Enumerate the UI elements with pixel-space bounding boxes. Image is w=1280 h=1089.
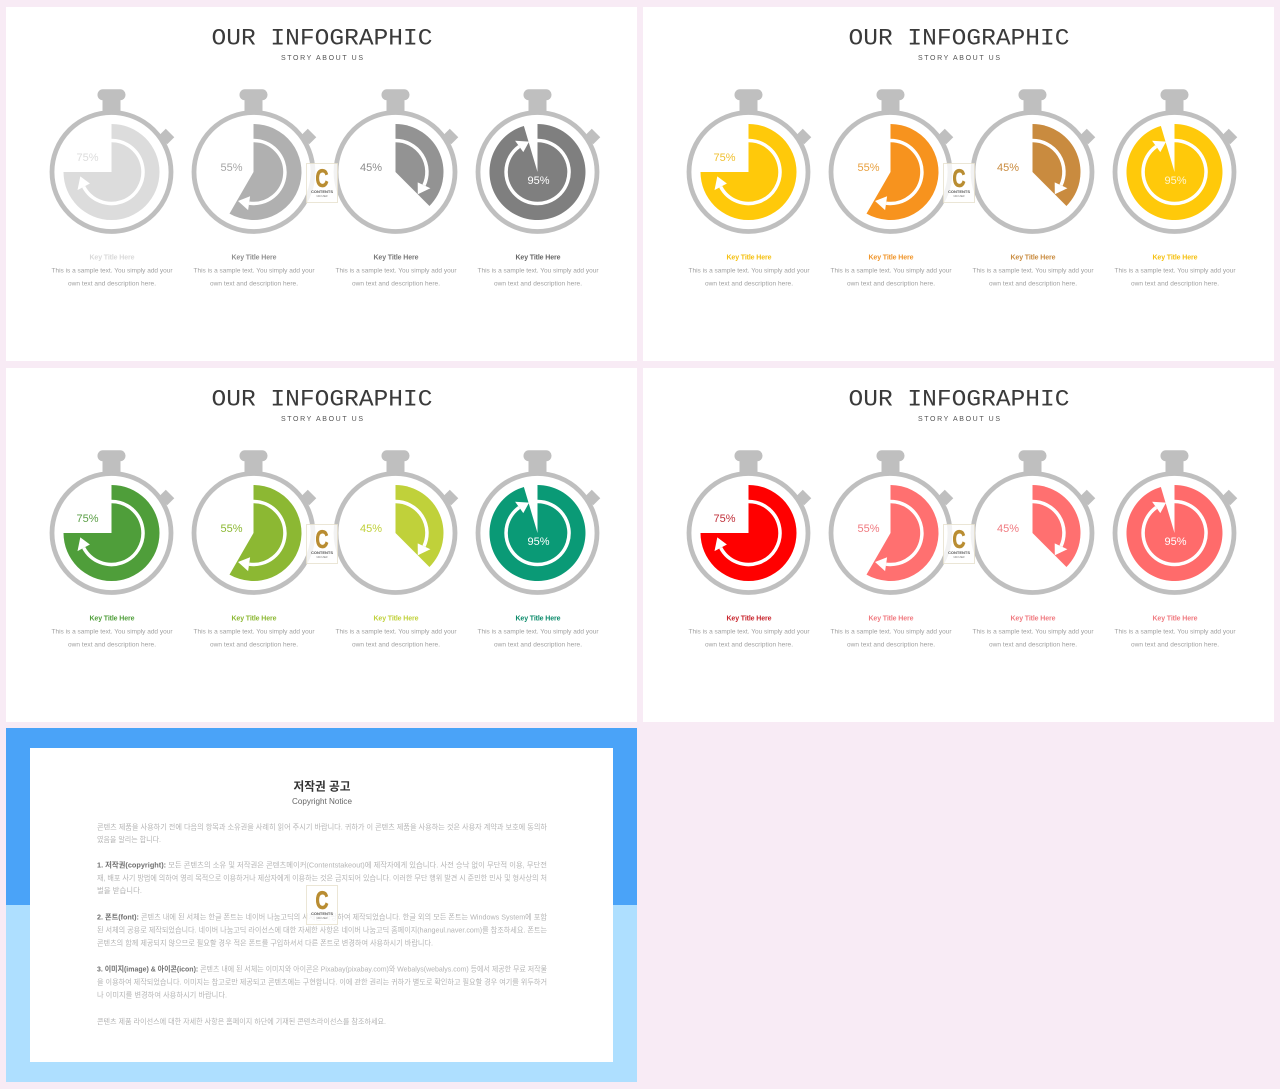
watermark logo: MAC USER — [316, 195, 328, 198]
stopwatch 95%: 95% — [528, 175, 550, 187]
stopwatch 45%: 45% — [360, 162, 382, 174]
caption 1: This is a sample text. You simply add your — [52, 628, 173, 636]
stopwatch 45% — [973, 450, 1095, 592]
stopwatch 45%: 45% — [997, 523, 1019, 535]
stopwatch 95% — [1115, 89, 1237, 232]
caption 1: This is a sample text. You simply add your — [52, 268, 173, 274]
stopwatch 75%: 75% — [76, 152, 99, 164]
watermark logo: CONTENTS — [311, 189, 333, 194]
caption 4: Key Title Here — [516, 254, 561, 262]
watermark logo: C — [952, 165, 966, 193]
watermark logo: CONTENTS — [948, 189, 970, 194]
subtitle: STORY ABOUT US — [281, 55, 363, 62]
intro paragraph: 콘텐츠 제품을 사용하기 전에 다음의 항목과 소유권을 사례히 읽어 주시기 바랍니다. 귀하가 이 콘텐츠 제품을 사용하는 것은 사용자 계약과 보호에 동의하 — [97, 822, 547, 832]
stopwatch 55% — [831, 450, 953, 592]
caption 2: Key Title Here — [868, 616, 914, 622]
caption 4 — [478, 254, 599, 288]
watermark logo: C — [316, 526, 328, 554]
caption 4: own text and description here. — [494, 642, 582, 648]
panel: grayscale stopwatches — [6, 7, 637, 361]
caption 4: This is a sample text. You simply add your — [1114, 268, 1236, 274]
caption 1: Key Title Here — [90, 616, 135, 622]
stopwatch 95%: 95% — [1164, 536, 1187, 548]
caption 4: This is a sample text. You simply add your — [1114, 628, 1236, 636]
caption 3: own text and description here. — [989, 642, 1077, 648]
notice heading: 저작권 공고 — [294, 778, 350, 794]
watermark logo: C — [952, 526, 966, 554]
caption 1: Key Title Here — [726, 254, 772, 262]
caption 4: own text and description here. — [1131, 642, 1219, 648]
caption 2: own text and description here. — [847, 280, 935, 288]
section 3: image and icon — [97, 964, 547, 1000]
watermark logo — [306, 886, 338, 924]
caption 3: This is a sample text. You simply add your — [972, 268, 1094, 274]
caption 1: own text and description here. — [68, 642, 156, 648]
section 2: font: 2. 폰트(font): 콘텐츠 내에 된 서체는 한글 폰트는 네이버 나눔고딕의 서체를 바탕하여 제작되었습니다. 한글 외의 모든 폰트는 Windows System에 포함 — [97, 912, 547, 922]
caption 4: This is a sample text. You simply add your — [478, 268, 599, 274]
watermark logo: MAC USER — [954, 195, 965, 198]
stopwatch 95% — [478, 450, 600, 592]
caption 3 — [972, 254, 1094, 288]
caption 3: Key Title Here — [374, 254, 419, 262]
stopwatch 55% — [831, 89, 953, 232]
caption 2: own text and description here. — [847, 642, 935, 648]
caption 4 — [1114, 254, 1236, 288]
section 2: font: 콘텐츠의 함께 제공되지 않으므로 필요할 경우 적은 폰트를 구입하셔서 다른 폰트로 변경하여 사용하시기 바랍니다. — [97, 938, 433, 948]
caption 1: own text and description here. — [68, 280, 156, 288]
caption 2: This is a sample text. You simply add your — [194, 268, 315, 274]
caption 2: This is a sample text. You simply add your — [830, 628, 952, 636]
caption 4: Key Title Here — [1152, 616, 1198, 622]
caption 4: own text and description here. — [1131, 280, 1219, 288]
watermark logo: CONTENTS — [948, 550, 970, 555]
caption 4: Key Title Here — [516, 616, 561, 622]
caption 2: own text and description here. — [210, 280, 298, 288]
stopwatch 45%: 45% — [360, 523, 382, 535]
watermark logo: MAC USER — [316, 556, 328, 559]
caption 2: Key Title Here — [232, 616, 277, 622]
subtitle: STORY ABOUT US — [918, 416, 1000, 423]
stopwatch 55%: 55% — [220, 162, 243, 174]
watermark logo: MAC USER — [316, 917, 328, 920]
caption 4 — [478, 616, 599, 648]
section 1: copyright: 벌을 받습니다. — [97, 885, 142, 895]
closing line: 콘텐츠 제품 라이선스에 대한 자세한 사항은 홈페이지 하단에 기재된 콘텐츠라이선스를 참조하세요. — [97, 1016, 386, 1026]
intro paragraph — [97, 822, 547, 844]
caption 2: Key Title Here — [868, 254, 914, 262]
caption 3: own text and description here. — [989, 280, 1077, 288]
stopwatch 45% — [973, 89, 1095, 232]
stopwatch 55% — [194, 450, 316, 592]
watermark logo: MAC USER — [954, 556, 965, 559]
stopwatch 75%: 75% — [714, 513, 736, 525]
watermark logo: C — [316, 165, 328, 193]
title: OUR INFOGRAPHIC — [212, 386, 432, 412]
caption 1 — [688, 616, 810, 648]
caption 2: own text and description here. — [210, 642, 298, 648]
caption 3: This is a sample text. You simply add your — [972, 628, 1094, 636]
watermark logo — [944, 164, 974, 202]
section 1: copyright: 1. 저작권(copyright): 모든 콘텐츠의 소유 및 저작권은 콘텐츠메이커(Contentstakeout)에 제작자에게 있습니다. 사전 승낙 없이 무단적 이용, 무단전 — [97, 860, 547, 870]
stopwatch 45%: 45% — [997, 162, 1019, 174]
caption 1: own text and description here. — [705, 280, 793, 288]
title: OUR INFOGRAPHIC — [848, 386, 1070, 412]
watermark logo: CONTENTS — [311, 911, 333, 916]
stopwatch 55%: 55% — [858, 162, 880, 174]
title: OUR INFOGRAPHIC — [848, 26, 1070, 52]
caption 2: This is a sample text. You simply add your — [830, 268, 952, 274]
stopwatch 95% — [478, 89, 600, 232]
title: OUR INFOGRAPHIC — [212, 26, 432, 52]
watermark logo: CONTENTS — [311, 550, 333, 555]
caption 4: own text and description here. — [494, 280, 582, 288]
caption 4: Key Title Here — [1152, 254, 1198, 262]
stopwatch 95% — [1115, 450, 1237, 592]
caption 2 — [194, 254, 315, 288]
caption 4 — [1114, 616, 1236, 648]
section 3: image and icon: 나 이미지를 변경하여 사용하시기 바랍니다. — [97, 990, 227, 1000]
section 3: image and icon: 을 이용하여 제작되었습니다. 이미지는 참고로만 제공되고 콘텐츠에는 구현합니다. 이에 관한 권리는 귀하가 별도로 확인하고 필요할 경우 여기를 위두하거 — [97, 976, 547, 986]
caption 1: This is a sample text. You simply add your — [688, 628, 810, 636]
stopwatch 55%: 55% — [858, 523, 880, 535]
section 2: font: 된 서체의 공용로 제작되었습니다. 네이버 나눔고딕 라이선스에 대한 자세한 사항은 네이버 나눔고딕 홈페이지(hangeul.naver.com)를 참조하세요. 폰트는 — [97, 924, 547, 934]
caption 2: This is a sample text. You simply add your — [194, 628, 315, 636]
caption 3: This is a sample text. You simply add your — [336, 268, 457, 274]
caption 1: Key Title Here — [726, 616, 772, 622]
caption 3: own text and description here. — [352, 642, 440, 648]
caption 2 — [194, 616, 315, 648]
caption 1 — [52, 254, 173, 288]
stopwatch 75%: 75% — [76, 513, 99, 525]
stopwatch 75% — [52, 450, 174, 592]
watermark logo — [306, 524, 338, 564]
stopwatch 75% — [689, 89, 811, 232]
caption 1: This is a sample text. You simply add your — [688, 268, 810, 274]
panel: green stopwatches — [6, 368, 637, 722]
watermark logo — [944, 524, 974, 564]
caption 1: own text and description here. — [705, 642, 793, 648]
stopwatch 45% — [336, 450, 458, 592]
section 3: image and icon: 3. 이미지(image) & 아이콘(icon): 콘텐츠 내에 된 서체는 이미지와 아이콘은 Pixabay(pixabay.com)와 Webalys(webalys.com) 등에서 제공한 무료 저작물 — [97, 964, 547, 974]
caption 3 — [972, 616, 1094, 648]
stopwatch 95%: 95% — [528, 536, 550, 548]
stopwatch 55% — [194, 89, 316, 232]
caption 1: Key Title Here — [90, 254, 135, 262]
caption 3 — [336, 616, 457, 648]
caption 3: This is a sample text. You simply add your — [336, 628, 457, 636]
caption 4: This is a sample text. You simply add your — [478, 628, 599, 636]
watermark logo — [306, 164, 338, 202]
caption 1 — [688, 254, 810, 288]
caption 3 — [336, 254, 457, 288]
caption 3: Key Title Here — [374, 616, 419, 622]
stopwatch 45% — [336, 89, 458, 232]
watermark logo: C — [316, 887, 328, 915]
section 1: copyright: 재, 배포 사기 방법에 의하여 영리 목적으로 이용하거나 제삼자에게 이용하는 것은 금지되어 있습니다. 이러한 무단 행위 발견 시 준민한 민사 및 형사상의 처 — [97, 872, 547, 882]
stopwatch 75% — [52, 89, 174, 232]
caption 2 — [830, 616, 952, 648]
stopwatch 75%: 75% — [714, 152, 736, 164]
subtitle: STORY ABOUT US — [281, 416, 363, 423]
caption 3: Key Title Here — [1010, 254, 1056, 262]
stopwatch 95%: 95% — [1164, 175, 1187, 187]
stopwatch 55%: 55% — [220, 523, 243, 535]
intro paragraph: 였음을 알리는 합니다. — [97, 834, 161, 844]
section 2: font — [97, 912, 547, 948]
section 1: copyright — [97, 860, 547, 895]
caption 3: own text and description here. — [352, 280, 440, 288]
caption 3: Key Title Here — [1010, 616, 1056, 622]
caption 2: Key Title Here — [232, 254, 277, 262]
panel: warm yellow and orange stopwatches — [643, 7, 1274, 361]
panel: copyright notice — [6, 728, 637, 1082]
stopwatch 75% — [689, 450, 811, 592]
caption 1 — [52, 616, 173, 648]
subtitle: STORY ABOUT US — [918, 55, 1000, 62]
caption 2 — [830, 254, 952, 288]
panel: red stopwatches — [643, 368, 1274, 722]
notice subheading: Copyright Notice — [292, 797, 353, 806]
